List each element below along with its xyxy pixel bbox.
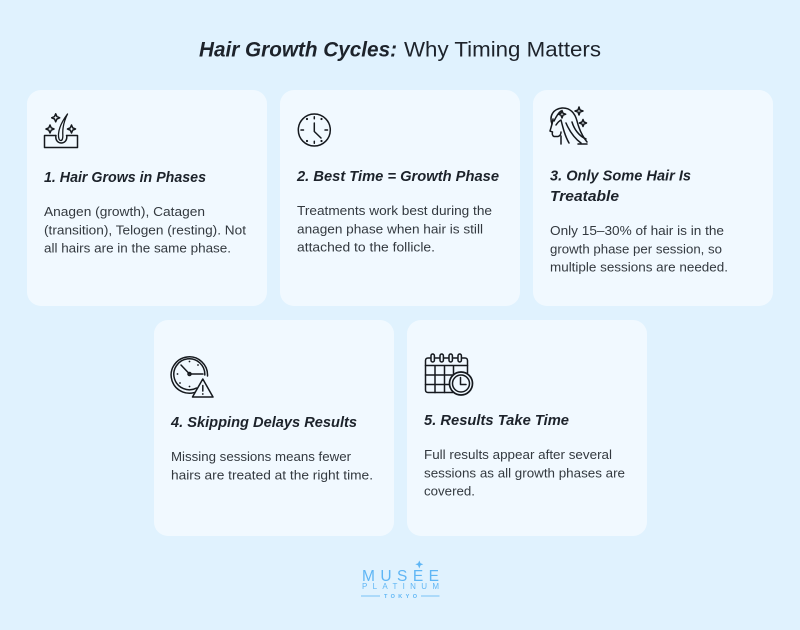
text block: all hairs are in the same phase. [44, 240, 231, 256]
text block: hairs are treated at the right time. [171, 468, 373, 482]
logo: Musee Platinum Tokyo [361, 560, 440, 600]
text block: Anagen (growth), Catagen [44, 204, 205, 219]
icon: calendar with clock [426, 354, 472, 395]
text block [550, 223, 728, 274]
heading: 3. Only Some Hair Is [550, 168, 691, 184]
panel: 1. Hair Grows in Phases [27, 90, 267, 306]
text block [297, 203, 492, 254]
panel: 4. Skipping Delays Results [154, 320, 394, 536]
text block: sessions as all growth phases are [424, 466, 625, 480]
text block: multiple sessions are needed. [550, 260, 728, 274]
text block [424, 447, 625, 498]
heading: 2. Best Time = Growth Phase [296, 169, 499, 185]
text block: Treatments work best during the [297, 203, 492, 218]
text block: attached to the follicle. [297, 240, 435, 254]
heading: Treatable [550, 189, 619, 205]
heading [550, 168, 691, 205]
text block [44, 204, 246, 256]
heading: 1. Hair Grows in Phases [44, 170, 206, 186]
panel: 3. Only Some Hair Is Treatable [533, 90, 773, 306]
icon: clock [298, 114, 330, 146]
logo: Musee Platinum Tokyo: TOKYO [384, 594, 418, 600]
text block: growth phase per session, so [550, 242, 722, 256]
heading: 4. Skipping Delays Results [170, 415, 357, 431]
title: Why Timing Matters [404, 38, 601, 62]
logo: Musee Platinum Tokyo: PLATINUM [362, 582, 439, 591]
heading: 5. Results Take Time [424, 413, 569, 429]
text block: Only 15–30% of hair is in the [550, 223, 724, 238]
panel: 2. Best Time = Growth Phase [280, 90, 520, 306]
icon: clock with warning triangle [171, 357, 213, 397]
text block: anagen phase when hair is still [297, 222, 483, 236]
icon: woman's hair profile [550, 107, 587, 144]
icon: hair follicle [44, 114, 78, 148]
text block: Full results appear after several [424, 447, 612, 462]
text block: Missing sessions means fewer [171, 449, 352, 464]
panel: 5. Results Take Time [407, 320, 647, 536]
text block: (transition), Telogen (resting). Not [44, 222, 246, 238]
logo: Musee Platinum Tokyo: MUSEE [362, 568, 439, 585]
text block [171, 449, 373, 482]
text block: covered. [424, 484, 475, 498]
title: Hair Growth Cycles: [199, 38, 397, 62]
title [199, 38, 601, 62]
